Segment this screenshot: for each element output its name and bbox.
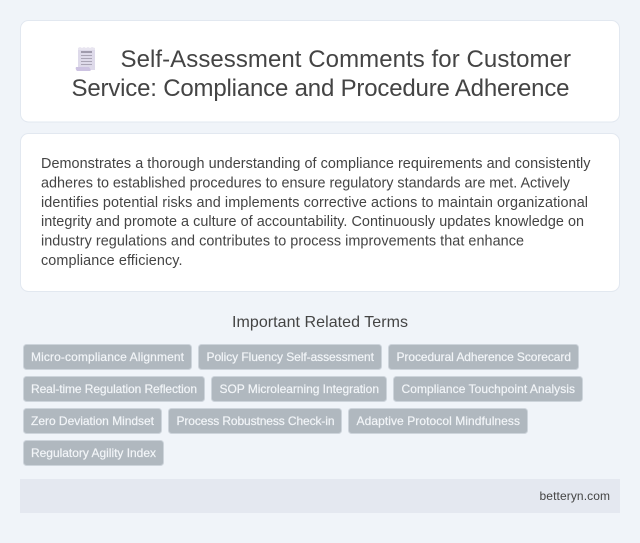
text block: description: [41, 156, 591, 269]
tag: Compliance Touchpoint Analysis: [402, 382, 575, 396]
tag: [24, 376, 204, 402]
footer bar: [20, 479, 620, 513]
tag: [198, 344, 382, 370]
tag: Procedural Adherence Scorecard: [396, 350, 571, 364]
text block: description: compliance efficiency.: [41, 253, 182, 269]
tag: SOP Microlearning Integration: [220, 382, 379, 396]
heading: important related terms: Important Related Terms: [232, 314, 408, 331]
tag: Real-time Regulation Reflection: [31, 382, 197, 396]
tag: [24, 344, 192, 370]
tag: Micro-compliance Alignment: [31, 350, 185, 364]
tag: [168, 408, 342, 434]
tag: Zero Deviation Mindset: [31, 414, 155, 428]
tag: [388, 344, 578, 370]
footer source: betteryn.com: [540, 489, 610, 503]
tag list: [24, 344, 582, 466]
text block: description: Demonstrates a thorough understanding of compliance requirements and consistently: [41, 156, 591, 172]
tag: [24, 408, 162, 434]
panel: title card: [20, 20, 620, 122]
text block: description: industry regulations and contributes to process improvements that enhance: [41, 234, 524, 250]
title: Service: Compliance and Procedure Adherence: [72, 75, 570, 102]
title: Self-Assessment Comments for Customer: [120, 46, 571, 73]
tag: [394, 376, 582, 402]
text block: description: identifies potential risks and implements corrective actions to maintain organizational: [41, 195, 588, 211]
tag: Process Robustness Check-in: [176, 414, 334, 428]
icon: receipt document: [76, 47, 95, 71]
tag: [24, 440, 164, 466]
text block: description: adheres to established procedures to ensure regulatory standards are met. Actively: [41, 175, 571, 191]
text block: description: integrity and promote a culture of accountability. Continuously updates knowledge on: [41, 214, 584, 230]
tag: [348, 408, 528, 434]
tag: Policy Fluency Self-assessment: [206, 350, 375, 364]
tag: [212, 376, 386, 402]
tag: Regulatory Agility Index: [31, 446, 156, 460]
panel: description card: [20, 134, 620, 292]
tag: Adaptive Protocol Mindfulness: [356, 414, 520, 428]
title: [72, 46, 571, 102]
